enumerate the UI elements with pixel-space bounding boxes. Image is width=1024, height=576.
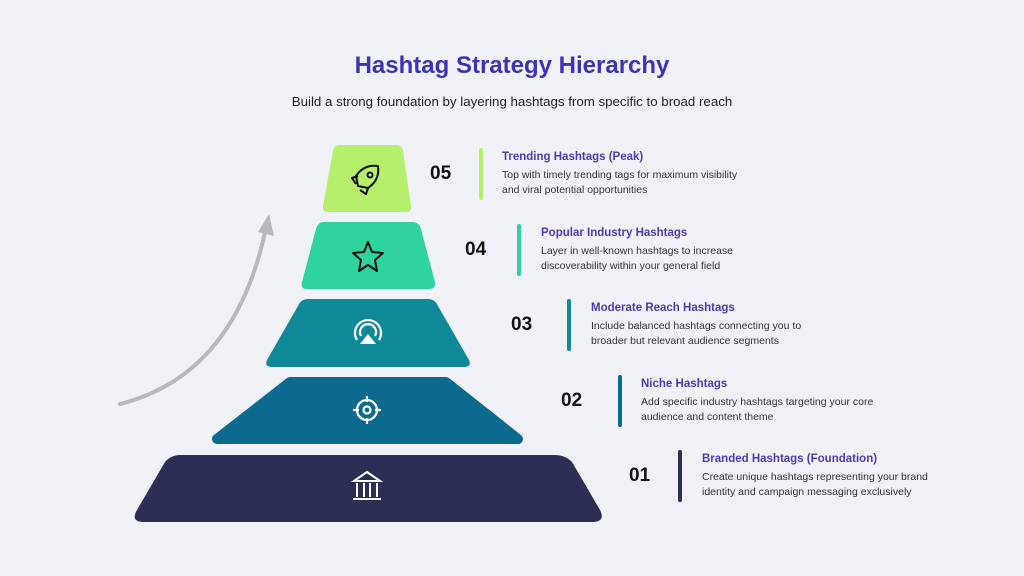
step 01: Branded Hashtags (Foundation) [702,453,877,465]
icon: star [353,242,383,271]
arrow: growth [120,214,274,404]
layer 4 [302,222,435,289]
step 05 [430,148,738,200]
step 03: 03 [511,314,532,335]
step 02: audience and content theme [641,411,774,423]
step 04: Popular Industry Hashtags [541,227,687,239]
step 02: Add specific industry hashtags targeting your core [641,396,873,408]
step 01: 01 [629,465,650,486]
step 02 [561,375,873,427]
step 02: 02 [561,390,582,411]
step 01: identity and campaign messaging exclusively [702,486,912,498]
icon: target [353,396,381,424]
step 03 [511,299,801,351]
step 01 [629,450,928,502]
layer 5 [323,145,411,212]
step 03: Include balanced hashtags connecting you to [591,320,801,332]
step 05: and viral potential opportunities [502,184,647,196]
step 05: 05 [430,163,451,184]
step 04: 04 [465,239,486,260]
title: Hashtag Strategy Hierarchy [355,52,669,79]
step 04: Layer in well-known hashtags to increase [541,245,733,257]
step 03: Moderate Reach Hashtags [591,302,735,314]
step 04 [465,224,733,276]
icon: broadcast [355,320,381,340]
icon: bank [353,472,381,499]
step 03: broader but relevant audience segments [591,335,779,347]
step 05: Top with timely trending tags for maximum visibility [502,169,737,181]
step 04: discoverability within your general field [541,260,720,272]
step 02: Niche Hashtags [641,378,727,390]
step 05: Trending Hashtags (Peak) [502,151,643,163]
layer 1 [135,455,602,522]
subtitle: Build a strong foundation by layering hashtags from specific to broad reach [292,94,732,109]
layer 2 [217,382,518,439]
layer 3 [266,299,470,367]
step 01: Create unique hashtags representing your brand [702,471,928,483]
icon: rocket [352,166,378,194]
